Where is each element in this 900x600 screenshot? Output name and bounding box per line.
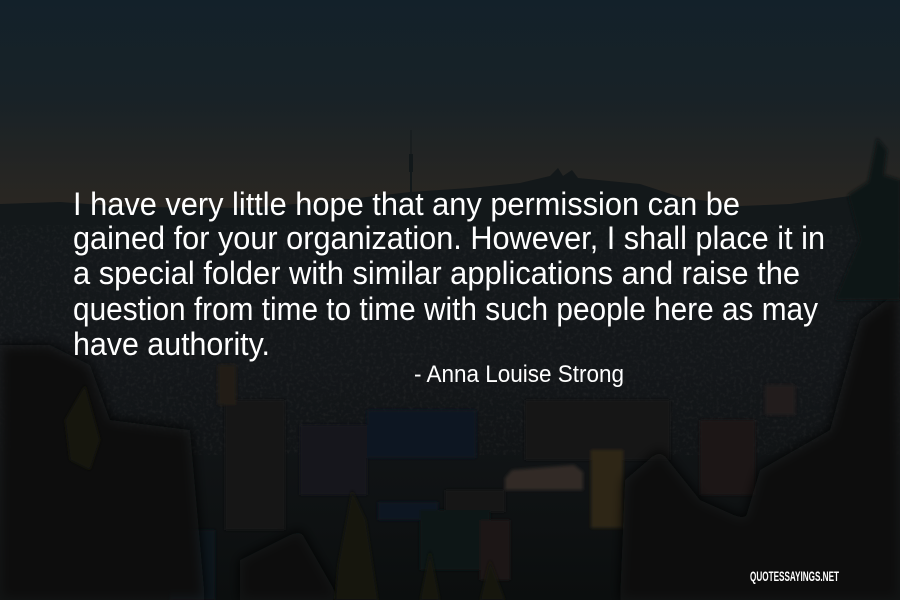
quote text: a special folder with similar applications and raise the	[73, 255, 800, 291]
foreground trees	[0, 290, 900, 600]
quote text	[73, 186, 825, 362]
hills	[0, 168, 900, 300]
tower	[409, 130, 413, 192]
attribution: - Anna Louise Strong	[414, 361, 624, 388]
quote text: have authority.	[73, 326, 270, 362]
watermark: QUOTESSAYINGS.NET	[750, 568, 839, 584]
sky	[0, 0, 900, 215]
tree, upper right	[835, 138, 900, 300]
quote text: question from time to time with such people here as may	[73, 291, 818, 327]
quote text: I have very little hope that any permission can be	[73, 186, 740, 222]
city texture	[0, 225, 900, 455]
quote text: gained for your organization. However, I shall place it in	[73, 220, 825, 256]
buildings	[170, 365, 795, 600]
lit treetops	[65, 385, 505, 600]
city	[0, 240, 900, 600]
